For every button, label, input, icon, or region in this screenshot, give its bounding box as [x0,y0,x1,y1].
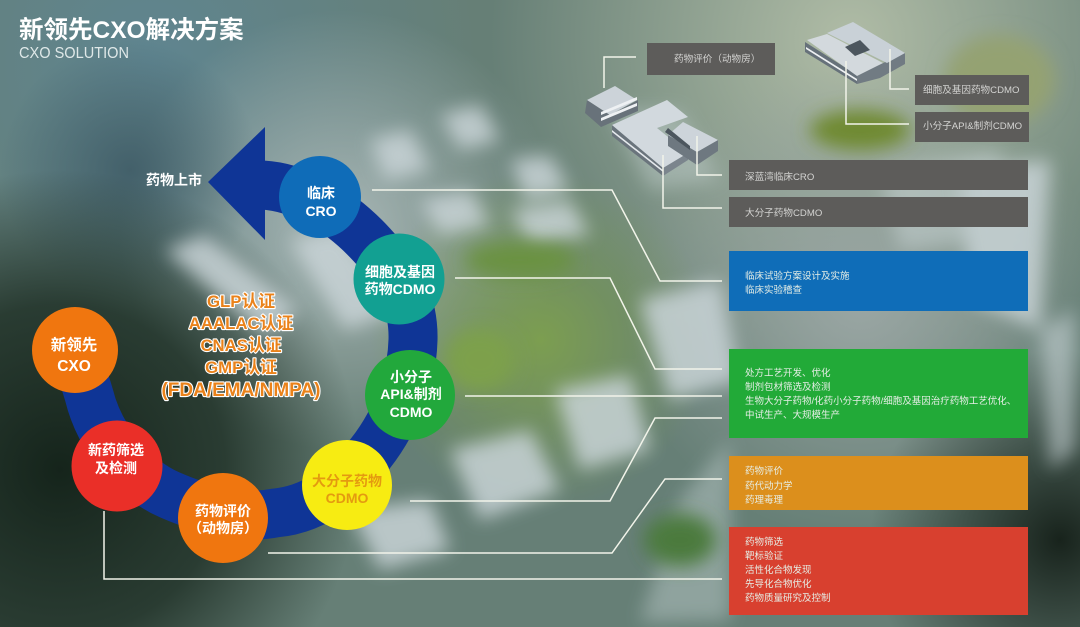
building: top right block [805,22,905,84]
node: 临床CRO [279,156,361,238]
title [19,15,244,62]
node: 临床CRO: CRO [305,203,337,219]
title: 新领先CXO解决方案 [19,15,244,44]
panel: clinical services [729,251,1028,311]
grey label: 大分子药物CDMO: 大分子药物CDMO [745,207,822,219]
node: 新药筛选及检测: 新药筛选 [88,442,144,458]
node: 新领先CXO: 新领先 [51,335,97,354]
grey label: 细胞及基因药物CDMO [915,75,1029,105]
panel: CDMO services [729,349,1028,438]
panel: drug evaluation services: 药理毒理 [745,494,784,506]
label: 药物上市: 药物上市 [146,172,202,188]
node: 小分子API&制剂CDMO [365,350,455,440]
panel: clinical services: 临床试验方案设计及实施 [745,270,850,282]
grey label: 深蓝湾临床CRO [729,160,1028,190]
node: 细胞及基因药物CDMO: 药物CDMO [365,281,435,297]
panel: drug screening services: 药物质量研究及控制 [745,592,831,604]
node: 大分子药物CDMO: CDMO [326,490,368,506]
panel: CDMO services: 中试生产、大规模生产 [745,409,840,421]
cycle arrow [75,127,413,515]
grey label: 细胞及基因药物CDMO: 细胞及基因药物CDMO [923,84,1019,96]
panel: CDMO services: 处方工艺开发、优化 [745,367,831,379]
certifications: GLP认证 [207,292,275,311]
certifications [161,292,321,401]
node: 新领先CXO: CXO [57,358,91,375]
panel: drug screening services: 药物筛选 [745,536,784,548]
panel: drug evaluation services: 药代动力学 [745,480,793,492]
panel: drug evaluation services: 药物评价 [745,465,784,477]
certifications: AAALAC认证 [189,314,293,333]
grey label: 药物评价(动物房) [647,43,775,75]
panel: drug screening services: 活性化合物发现 [745,564,812,576]
node: 小分子API&制剂CDMO: CDMO [390,404,432,420]
certifications: CNAS认证 [200,336,282,355]
title: CXO SOLUTION [19,45,129,62]
node: 临床CRO: 临床 [307,185,335,201]
panel: drug screening services: 靶标验证 [745,550,784,562]
grey label: 小分子API&制剂CDMO [915,112,1029,142]
node: 新药筛选及检测 [72,420,162,512]
grey label: 药物评价(动物房): 药物评价（动物房） [674,53,760,65]
certifications: (FDA/EMA/NMPA) [161,380,321,401]
connector lines: cycle to service panels [104,190,722,579]
node: 细胞及基因药物CDMO [354,234,444,324]
node: 小分子API&制剂CDMO: 小分子 [390,369,432,385]
panel: drug screening services: 先导化合物优化 [745,578,812,590]
building: central block [612,100,718,176]
node: 大分子药物CDMO: 大分子药物 [312,473,382,489]
node: 大分子药物CDMO [302,440,392,530]
node: 细胞及基因药物CDMO: 细胞及基因 [365,264,435,280]
panel: CDMO services: 生物大分子药物/化药小分子药物/细胞及基因治疗药物工艺优化、 [745,395,1016,407]
panel: CDMO services: 制剂包材筛选及检测 [745,381,831,393]
node: 药物评价(动物房): （动物房） [188,520,258,536]
grey label: 小分子API&制剂CDMO: 小分子API&制剂CDMO [923,120,1022,132]
grey label: 大分子药物CDMO [729,197,1028,227]
grey label: 深蓝湾临床CRO: 深蓝湾临床CRO [745,171,814,183]
connector lines: buildings to grey labels [604,49,909,208]
panel: drug screening services [729,527,1028,615]
node: 小分子API&制剂CDMO: API&制剂 [380,386,442,402]
node: 新药筛选及检测: 及检测 [95,460,137,476]
panel: drug evaluation services [729,456,1028,510]
buildings illustration [585,22,905,176]
node: 新领先CXO [32,307,118,393]
node: 药物评价(动物房) [178,473,268,563]
node: 药物评价(动物房): 药物评价 [195,503,251,519]
certifications: GMP认证 [205,358,277,377]
building: left block [585,86,638,127]
panel: clinical services: 临床实验稽查 [745,284,803,296]
